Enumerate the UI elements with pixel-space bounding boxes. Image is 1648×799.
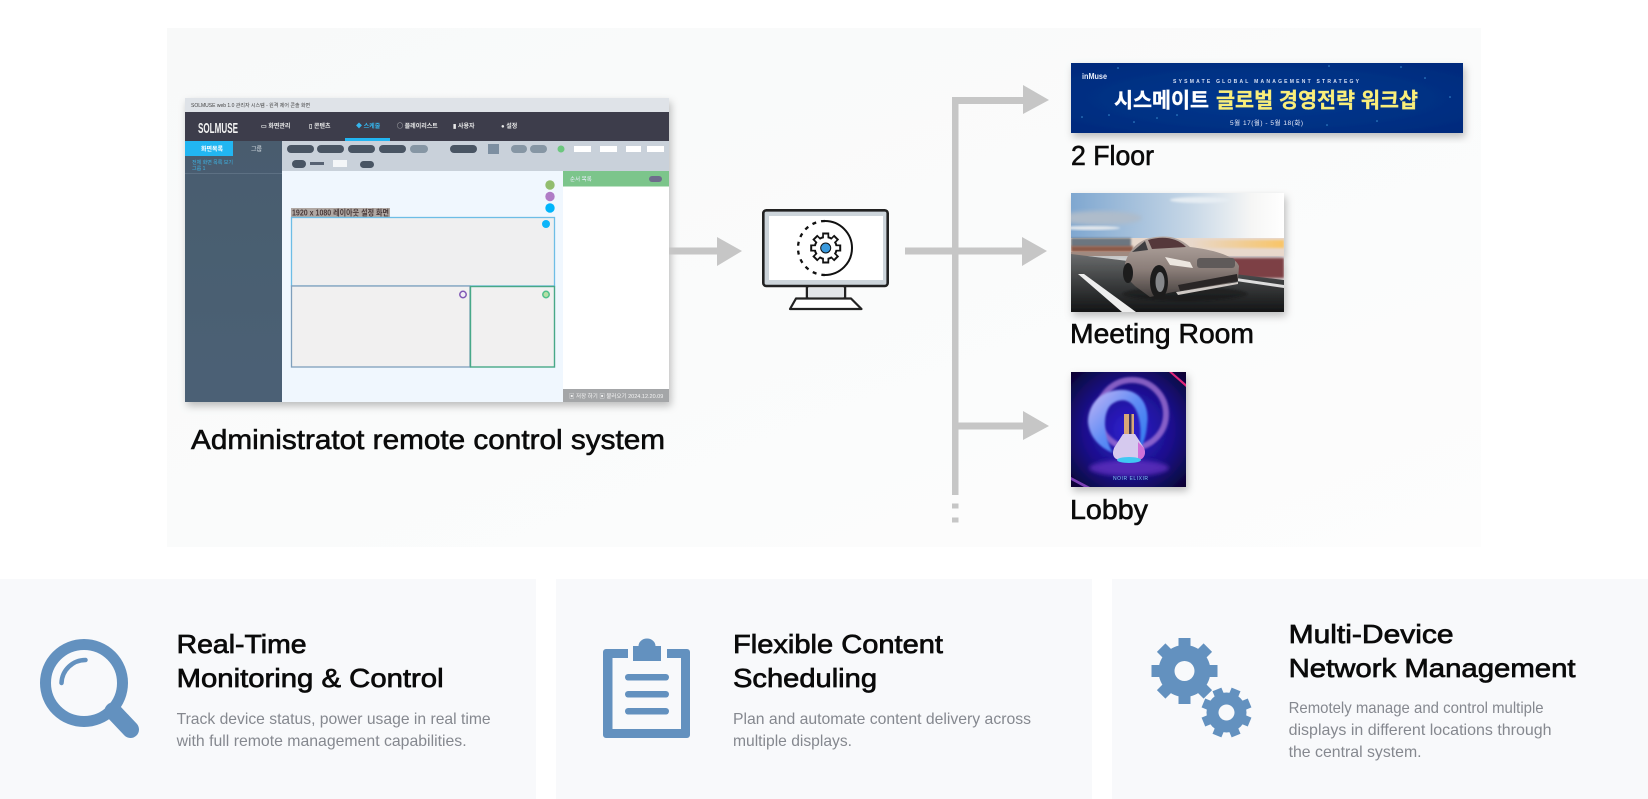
heading: administrator remote control system: Administratot remote control system: [191, 424, 665, 455]
display: lobby perfume image: [1071, 372, 1186, 487]
admin software window screenshot: 전체 화면 목록 보기: [192, 159, 233, 166]
zone layout preview: [282, 171, 563, 402]
admin software window screenshot: 그룹 1: [192, 166, 206, 172]
panel: system diagram background: [167, 28, 1481, 547]
admin software window screenshot: 화면목록: [201, 145, 224, 153]
icon: clipboard: [603, 639, 690, 738]
icon: monitor with gear: [763, 210, 888, 309]
admin software window screenshot: ◆ 스케줄: [356, 122, 381, 130]
icon: magnifying glass: [46, 644, 130, 730]
display: banner screen: SYSMATE GLOBAL MANAGEMENT STRATEGY: [1173, 79, 1360, 85]
display: banner screen: inMuse: [1082, 72, 1107, 81]
display: banner screen: 시스메이트: [1114, 90, 1209, 112]
arrows: branching distribution to displays: [905, 85, 1049, 522]
heading: flexible content scheduling: Flexible Content: [733, 629, 944, 659]
admin software window screenshot: ◯ 플레이리스트: [397, 122, 438, 130]
text: flexible content description: Plan and automate content delivery across: [733, 711, 1031, 728]
heading: flexible content scheduling: Scheduling: [733, 663, 877, 693]
admin software window screenshot: ● 설정: [501, 122, 517, 130]
display: banner screen: [1071, 63, 1463, 133]
heading: real-time monitoring: Monitoring & Control: [177, 663, 444, 693]
icon: two gears: [1152, 638, 1259, 745]
text: real-time monitoring description: Track device status, power usage in real time: [177, 711, 491, 728]
text: multi-device description: the central system.: [1289, 744, 1422, 761]
text: flexible content description: multiple displays.: [733, 733, 852, 750]
admin software window screenshot: ▮ 사용자: [453, 122, 475, 130]
display: banner screen: 글로벌 경영전략 워크샵: [1216, 90, 1418, 112]
admin software window screenshot: ▯ 콘텐츠: [309, 122, 331, 130]
label: Meeting Room: Meeting Room: [1070, 318, 1254, 349]
panel: real-time monitoring: [0, 579, 536, 799]
text: multi-device description: Remotely manage and control multiple: [1289, 700, 1544, 717]
arrow: admin system to server: [669, 237, 742, 266]
admin software window screenshot: ▣ 저장 하기 ▣ 불러오기 2024.12.20.09: [569, 392, 663, 400]
text: multi-device description: displays in different locations through: [1289, 722, 1552, 739]
zone layout preview: 1920 x 1080 레이아웃 설정 화면: [292, 208, 389, 218]
display: meeting room car image: [1058, 193, 1284, 312]
panel: multi-device network management: [1112, 579, 1648, 799]
admin software window screenshot: [185, 98, 669, 402]
admin software window screenshot: ▭ 화면관리: [261, 122, 290, 130]
admin software window screenshot: SOLMUSE web 1.0 관리자 시스템 - 원격 제어 콘솔 화면: [191, 102, 311, 109]
heading: real-time monitoring: Real-Time: [177, 629, 307, 659]
heading: multi-device network management: Multi-Device: [1289, 619, 1454, 649]
display: banner screen: 5월 17(월) - 5월 18(화): [1230, 118, 1303, 127]
admin software window screenshot: SOLMUSE: [198, 120, 238, 137]
admin software window screenshot: 그룹: [251, 146, 263, 153]
label: 2 Floor: 2 Floor: [1071, 140, 1154, 171]
text: real-time monitoring description: with full remote management capabilities.: [176, 733, 467, 750]
label: Lobby: Lobby: [1070, 494, 1148, 525]
display: lobby perfume image: NOIR ELIXIR: [1113, 476, 1148, 482]
admin software window screenshot: 순서 목록: [570, 175, 592, 183]
panel: flexible content scheduling: [556, 579, 1092, 799]
heading: multi-device network management: Network Management: [1289, 653, 1576, 683]
